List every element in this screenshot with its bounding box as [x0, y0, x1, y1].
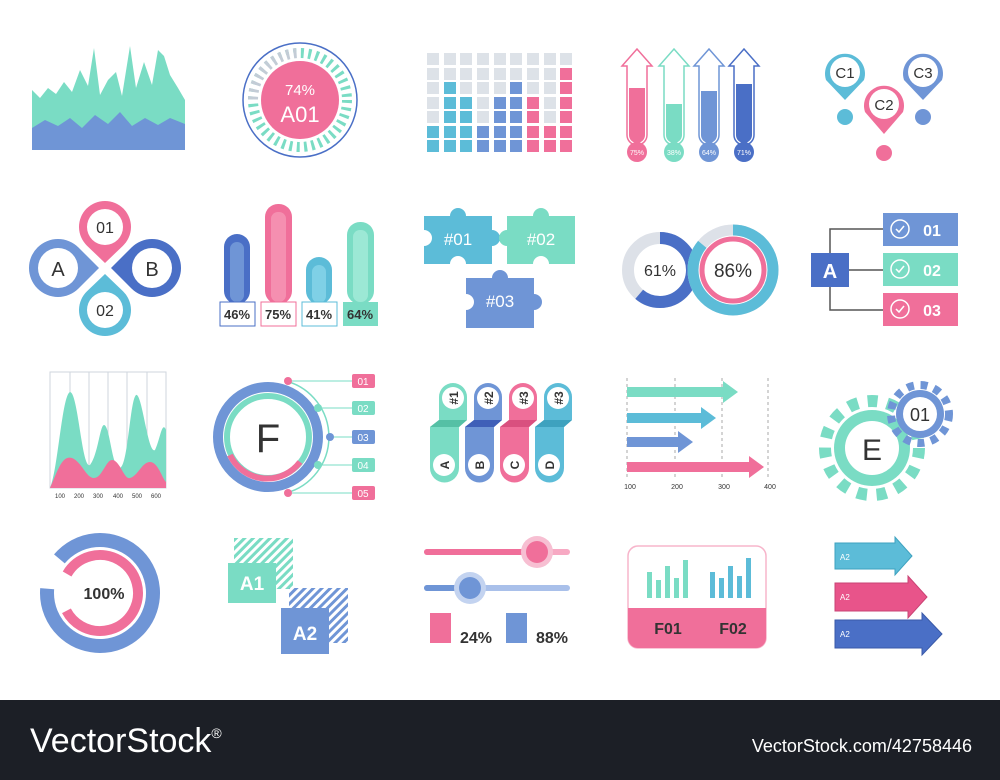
arrow tubes: 64% — [702, 150, 716, 157]
square grid chart — [427, 53, 572, 152]
arrow tubes: 38% — [667, 150, 681, 157]
wave chart: 600 — [151, 494, 162, 500]
F ring with labels: F — [256, 417, 280, 461]
bar chart percentages: 46% — [224, 307, 250, 322]
F ring with labels: 04 — [357, 461, 369, 472]
arrows A2: A2 — [840, 593, 850, 602]
wave chart: 300 — [93, 494, 104, 500]
ribbon labels: D — [543, 460, 557, 469]
donuts 61% 86% — [628, 230, 773, 310]
gears E 01: E — [862, 434, 882, 467]
F ring with labels: 05 — [357, 489, 369, 500]
clover A B 01 02: 01 — [96, 220, 114, 237]
location pins C1 C2 C3: C2 — [874, 97, 894, 114]
clover A B 01 02: B — [145, 259, 159, 281]
arrows A2 — [835, 537, 942, 655]
bar panel F01 F02: F01 — [654, 621, 682, 638]
bar chart percentages: 64% — [347, 307, 373, 322]
horizontal arrow chart: 400 — [764, 484, 776, 491]
clover A B 01 02: A — [51, 259, 65, 281]
bar chart percentages: 41% — [306, 307, 332, 322]
ribbon labels: #3 — [517, 391, 531, 405]
arrow tubes: 71% — [737, 150, 751, 157]
puzzle pieces — [424, 208, 575, 328]
ribbon labels: #2 — [482, 391, 496, 405]
F ring with labels: 03 — [357, 433, 369, 444]
puzzle pieces: #02 — [527, 230, 555, 249]
ribbon labels: B — [473, 460, 487, 469]
gauge A01: A01 — [280, 102, 320, 127]
wave chart — [50, 372, 166, 500]
F ring with labels — [218, 374, 375, 500]
footer bar: VectorStock — [30, 722, 211, 760]
A1 A2 boxes: A1 — [240, 574, 265, 595]
wave chart: 100 — [55, 494, 66, 500]
A1 A2 boxes: A2 — [293, 624, 317, 645]
footer bar — [0, 700, 1000, 780]
footer bar: ® — [211, 725, 222, 741]
clover A B 01 02: 02 — [96, 303, 114, 320]
ribbon labels: #1 — [447, 391, 461, 405]
horizontal arrow chart — [624, 378, 776, 491]
ribbon labels: #3 — [552, 391, 566, 405]
tree A 01 02 03: A — [823, 261, 837, 283]
ribbon labels: C — [508, 460, 522, 469]
location pins C1 C2 C3: C3 — [913, 65, 933, 82]
area chart — [32, 46, 185, 150]
arrow tubes — [622, 49, 759, 162]
sliders: 24% — [460, 630, 492, 647]
wave chart: 200 — [74, 494, 85, 500]
donuts 61% 86%: 86% — [714, 261, 752, 282]
bar chart percentages — [220, 204, 378, 326]
sliders — [424, 536, 570, 647]
location pins C1 C2 C3: C1 — [835, 65, 855, 82]
donut 100%: 100% — [84, 586, 124, 603]
wave chart: 400 — [113, 494, 124, 500]
F ring with labels: 02 — [357, 404, 369, 415]
arrow tubes: 75% — [630, 150, 644, 157]
clover A B 01 02 — [29, 201, 181, 336]
puzzle pieces: #03 — [486, 292, 514, 311]
location pins C1 C2 C3 — [825, 54, 943, 161]
arrows A2: A2 — [840, 553, 850, 562]
bar panel F01 F02: F02 — [719, 621, 747, 638]
A1 A2 boxes — [228, 538, 348, 654]
gears E 01: 01 — [910, 405, 930, 425]
wave chart: 500 — [132, 494, 143, 500]
sliders: 88% — [536, 630, 568, 647]
donut 100% — [25, 518, 175, 668]
ribbon labels — [430, 383, 572, 483]
tree A 01 02 03: 01 — [923, 223, 941, 240]
horizontal arrow chart: 300 — [718, 484, 730, 491]
horizontal arrow chart: 100 — [624, 484, 636, 491]
puzzle pieces: #01 — [444, 230, 472, 249]
gears E 01 — [825, 385, 949, 495]
footer bar: VectorStock.com/42758446 — [752, 736, 972, 756]
ribbon labels: A — [438, 460, 452, 469]
tree A 01 02 03: 02 — [923, 263, 941, 280]
tree A 01 02 03 — [811, 213, 958, 326]
gauge A01 — [243, 43, 357, 157]
gauge A01: 74% — [285, 82, 315, 99]
donuts 61% 86%: 61% — [644, 263, 676, 280]
arrows A2: A2 — [840, 630, 850, 639]
F ring with labels: 01 — [357, 377, 369, 388]
horizontal arrow chart: 200 — [671, 484, 683, 491]
tree A 01 02 03: 03 — [923, 303, 941, 320]
bar chart percentages: 75% — [265, 307, 291, 322]
bar panel F01 F02 — [628, 546, 766, 648]
